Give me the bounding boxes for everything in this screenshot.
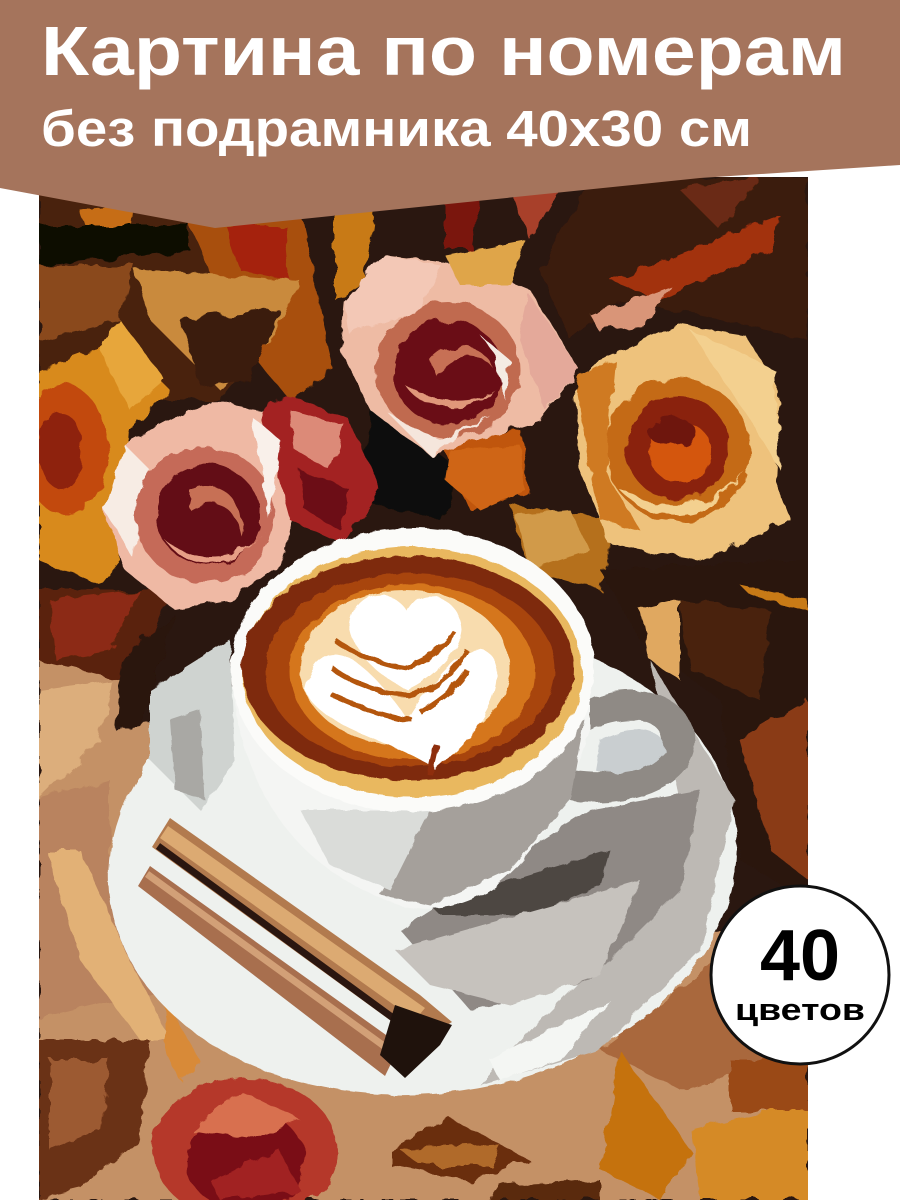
saucer	[107, 640, 738, 1096]
title: Картина по номерам	[41, 12, 846, 90]
cup	[231, 528, 695, 908]
scattered dried flowers	[445, 240, 590, 570]
rose: bottom red	[153, 1078, 337, 1200]
painting background: table	[39, 660, 808, 1200]
rose: top pink	[340, 255, 580, 455]
cinnamon sticks	[138, 818, 452, 1078]
badge: 40 colours: 40	[760, 916, 840, 996]
painting: roses and cappuccino	[23, 177, 808, 1200]
latte art: heart and leaf	[305, 595, 497, 775]
rose: left yellow	[39, 320, 170, 584]
badge: 40 colours	[711, 886, 889, 1064]
painting background: dark leaves	[39, 177, 808, 900]
subtitle: без подрамника 40х30 см	[41, 100, 752, 157]
rose: left pink	[105, 395, 380, 610]
coffee and latte art	[242, 547, 582, 797]
rose: top-right yellow	[575, 325, 790, 560]
banner	[0, 0, 900, 228]
badge: 40 colours: цветов	[735, 992, 865, 1027]
